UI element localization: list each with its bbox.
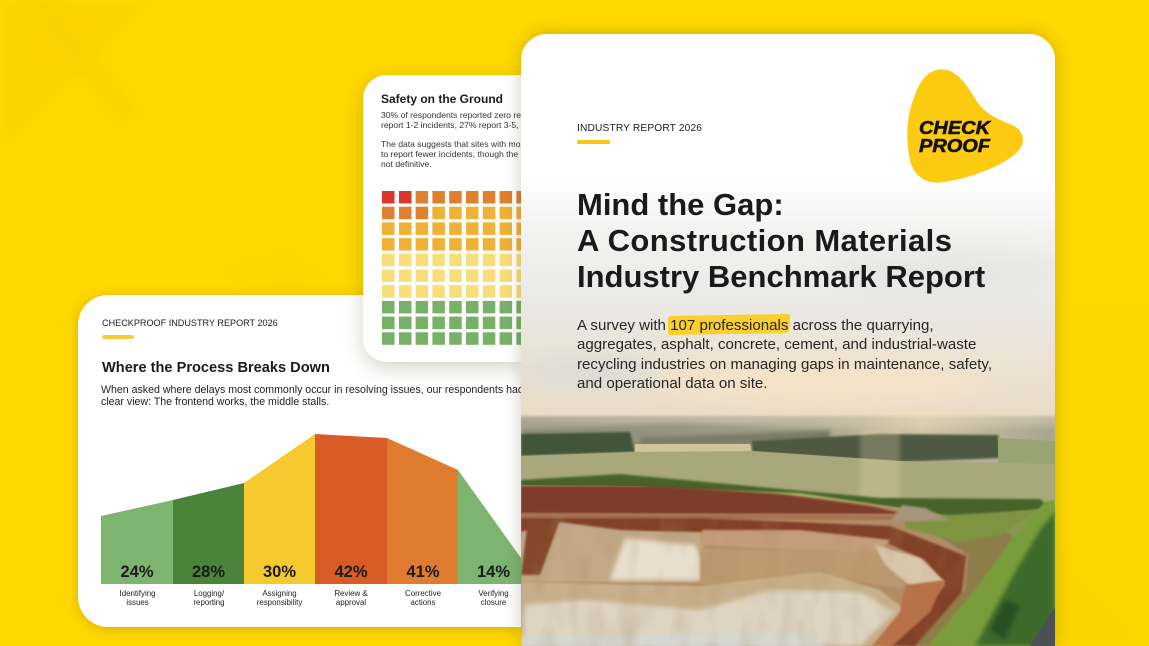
horizon haze [515,416,1061,476]
logo: CHECK [919,118,992,138]
panel: where the process breaks down [78,295,521,627]
main field [521,451,1055,505]
heading: safety: Safety on the Ground [381,92,503,106]
cover title: Mind the Gap: [577,186,784,222]
safety text block: report 1-2 incidents, 27% report 3-5, [381,120,519,130]
funnel area chart: 14% [477,563,510,581]
cover summary text [577,316,992,392]
cover photo: sky and quarry [521,34,1055,646]
funnel area chart: 24% [120,563,154,581]
streak texture [522,518,902,646]
cover summary text: recycling industries on managing gaps in maintenance, safety, [577,356,992,372]
funnel area chart: 42% [334,563,368,581]
pit base [521,485,1000,646]
process text block: When asked where delays most commonly occur in resolving issues, our respondents had a [101,384,521,396]
eyebrow accent bar [102,335,134,339]
tan walls [521,522,705,582]
funnel area chart: 30% [263,563,296,581]
cover eyebrow accent bar [577,140,610,144]
red upper band [521,486,905,514]
logo [907,69,1023,183]
funnel area chart: reporting [193,598,225,607]
lower pale walls [521,572,908,646]
funnel area chart: 28% [192,563,225,581]
funnel area chart: closure [481,598,507,607]
heading: process: Where the Process Breaks Down [102,360,330,376]
panel: report cover [521,34,1055,646]
funnel area chart: 41% [406,563,440,581]
funnel area chart: Verifying [478,589,509,598]
funnel area chart: responsibility [257,598,302,607]
safety text block: not definitive. [381,159,432,169]
safety text block: The data suggests that sites with mor [381,139,521,149]
safety text block [381,110,521,169]
cover eyebrow: INDUSTRY REPORT 2026 [577,123,702,134]
funnel area chart: Review & [334,589,368,598]
cover title: Industry Benchmark Report [577,258,985,294]
process text block: clear view: The frontend works, the middle stalls. [101,396,329,408]
funnel area chart [101,434,521,607]
safety text block: 30% of respondents reported zero re [381,110,521,120]
logo: PROOF [919,136,991,156]
cover summary text: aggregates, asphalt, concrete, cement, and industrial-waste [577,336,976,353]
funnel area chart: Assigning [262,589,297,598]
safety text block: to report fewer incidents, though the [381,149,518,159]
cover title [577,186,985,294]
outer ground [899,510,1020,646]
panel eyebrow: CHECKPROOF INDUSTRY REPORT 2026 [102,318,278,328]
funnel area chart: Corrective [405,589,442,598]
funnel area chart: actions [410,598,436,607]
cover title: A Construction Materials [577,222,952,258]
cover summary text: A survey with 107 professionals across the quarrying, [577,316,934,334]
panel: safety on the ground [363,75,521,362]
green embankment [928,500,1055,646]
cover summary text: and operational data on site. [577,375,768,392]
process text block [101,384,521,408]
ground base [521,470,1055,646]
funnel area chart: approval [336,598,366,607]
highlight behind 107 professionals [668,314,790,335]
funnel area chart: Identifying [120,589,155,598]
funnel area chart: issues [126,598,149,607]
waffle chart [382,191,521,345]
funnel area chart: Logging/ [194,589,225,598]
